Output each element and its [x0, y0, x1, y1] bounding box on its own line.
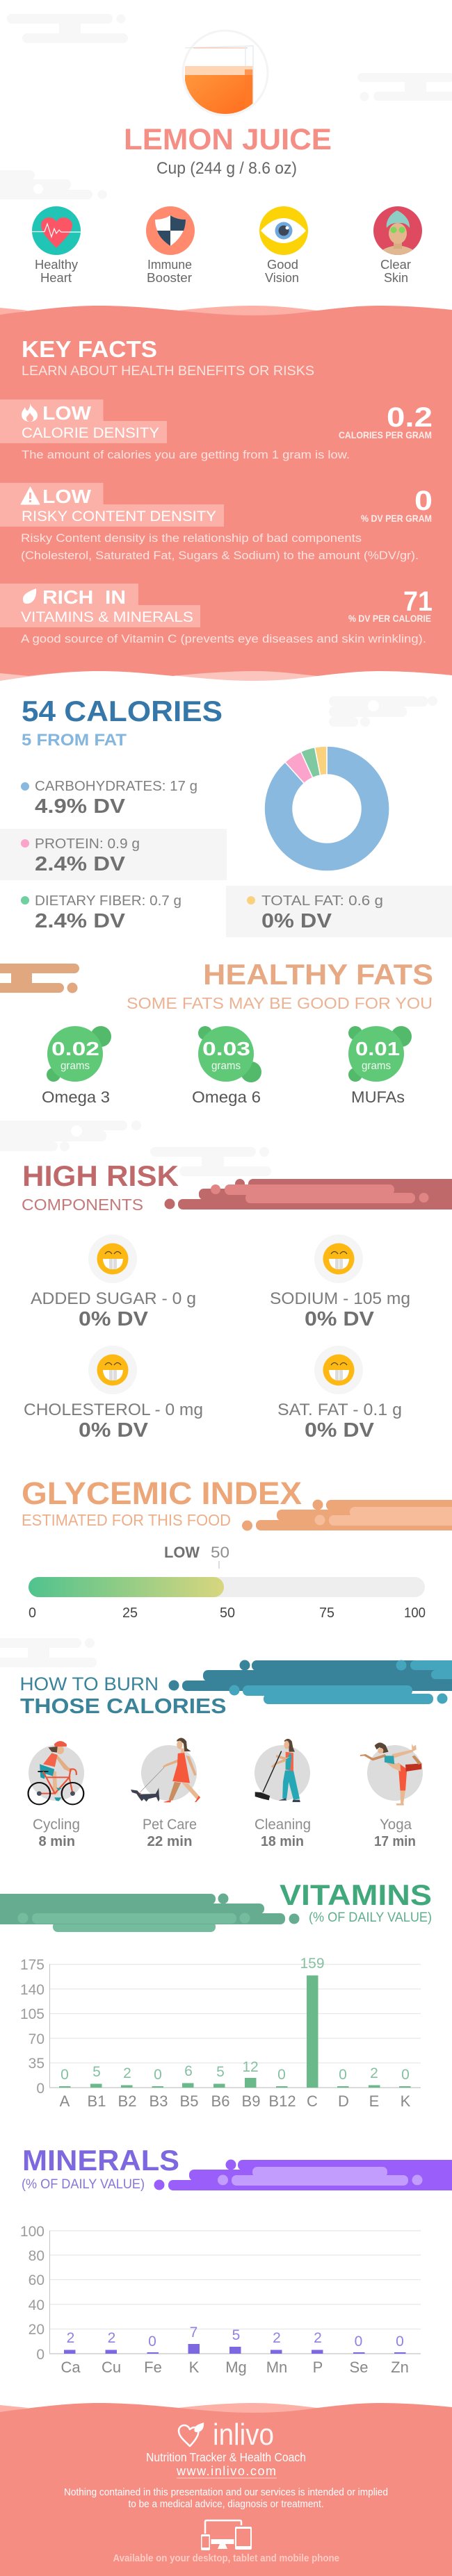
bar chart: minerals: 60	[29, 2272, 45, 2288]
bar chart: vitamins: 0	[154, 2067, 162, 2083]
bar chart: minerals: Fe	[144, 2359, 162, 2376]
fact: calorie density: CALORIE DENSITY	[22, 425, 159, 441]
item: sodium: 0% DV	[305, 1308, 375, 1330]
item: saturated fat	[277, 1346, 402, 1442]
subheading: (% OF DAILY VALUE)	[309, 1910, 432, 1925]
heading line 1: HOW TO BURN	[19, 1674, 159, 1694]
fact: calorie density: LOW	[42, 402, 92, 424]
bar chart: vitamins: B12	[268, 2092, 296, 2110]
bar chart: minerals: Mg	[225, 2359, 247, 2376]
bar chart: vitamins: 12	[242, 2059, 259, 2075]
bar chart: vitamins: 6	[184, 2063, 193, 2079]
heading: KEY FACTS	[22, 336, 157, 362]
fact: risky content density: (Cholesterol, Saturated Fat, Sugars & Sodium) to the amount (%DV/gr).	[21, 549, 419, 562]
panel: footer	[0, 2403, 452, 2576]
legend: protein: 2.4% DV	[35, 853, 126, 875]
bar chart: minerals: 20	[29, 2322, 45, 2338]
benefit: immune booster	[146, 206, 195, 285]
heading: 54 CALORIES	[22, 695, 223, 727]
activity: yoga: Yoga	[380, 1817, 412, 1833]
fact: risky content density	[0, 483, 433, 562]
panel: glycemic index	[22, 1476, 452, 1621]
bar chart: minerals: 80	[29, 2248, 45, 2264]
bar chart: vitamins: 5	[216, 2064, 225, 2080]
omega 6: Omega 6	[192, 1088, 261, 1106]
bar chart: minerals: Zn	[391, 2359, 409, 2376]
bar chart: vitamins: B3	[150, 2092, 168, 2110]
fact: rich in vitamins and minerals: % DV PER CALORIE	[348, 613, 431, 624]
bar chart: vitamins: 5	[92, 2064, 101, 2080]
subheading: COMPONENTS	[22, 1196, 143, 1214]
panel: calories	[0, 695, 452, 937]
item: saturated fat: SAT. FAT - 0.1 g	[277, 1401, 402, 1419]
bar chart: vitamins: A	[60, 2092, 70, 2110]
background cloud: calories	[329, 696, 437, 727]
bar chart: vitamins: 0	[401, 2067, 410, 2083]
fact: rich in vitamins and minerals: RICH IN	[42, 586, 126, 608]
activity: cleaning	[255, 1739, 311, 1849]
legend: dietary fiber: 2.4% DV	[35, 910, 126, 932]
bar chart: minerals: 7	[190, 2325, 197, 2340]
subheading: ESTIMATED FOR THIS FOOD	[22, 1511, 231, 1529]
icon: devices	[201, 2520, 252, 2550]
gauge scale: 25	[122, 1605, 138, 1621]
activity: pet care	[131, 1738, 200, 1849]
background cloud: burn	[0, 1638, 97, 1667]
fact: rich in vitamins and minerals	[0, 584, 433, 645]
disclaimer	[64, 2486, 388, 2510]
decorative bars: vitamins	[0, 1894, 299, 1932]
heading: HEALTHY FATS	[203, 958, 433, 991]
omega 3: 0.02	[51, 1038, 99, 1059]
website: www.inlivo.com	[176, 2464, 276, 2478]
bar chart: vitamins: 2	[370, 2065, 378, 2081]
item: cholesterol	[24, 1346, 203, 1442]
fact: rich in vitamins and minerals: 71	[403, 586, 433, 617]
omega 3: grams	[60, 1060, 90, 1072]
bar chart: vitamins: E	[369, 2092, 379, 2110]
omega 6	[192, 1026, 261, 1106]
benefit: immune booster: Booster	[147, 271, 192, 285]
decorative bar: fats	[0, 964, 79, 993]
activity: cycling	[29, 1741, 84, 1849]
donut chart	[264, 746, 389, 871]
decorative bars: burn	[168, 1660, 452, 1704]
fact: rich in vitamins and minerals: VITAMINS & MINERALS	[21, 609, 193, 625]
bar chart: vitamins: 2	[123, 2065, 131, 2081]
bar chart: vitamins: B6	[211, 2092, 229, 2110]
activity: pet care: 22 min	[147, 1834, 192, 1849]
fact: risky content density: Risky Content density is the relationship of bad components	[21, 531, 362, 545]
fact: calorie density: CALORIES PER GRAM	[339, 429, 432, 440]
background clouds: top	[0, 14, 452, 199]
panel: how to burn those calories	[19, 1660, 452, 1849]
benefit: clear skin: Clear	[380, 258, 411, 272]
gauge value	[164, 1544, 229, 1569]
bar chart: vitamins: C	[307, 2092, 318, 2110]
heading: HIGH RISK	[22, 1159, 179, 1192]
bar chart: minerals: 40	[29, 2297, 45, 2313]
disclaimer: to be a medical advice, diagnosis or treatment.	[128, 2498, 324, 2510]
legend: protein: PROTEIN: 0.9 g	[35, 836, 140, 852]
logo: inlivo	[213, 2418, 274, 2452]
item: cholesterol: 0% DV	[79, 1419, 149, 1442]
subheading: SOME FATS MAY BE GOOD FOR YOU	[127, 994, 433, 1012]
bar chart: minerals: Ca	[60, 2359, 81, 2376]
bar chart: minerals: K	[189, 2359, 200, 2376]
decorative bars: high risk	[164, 1179, 452, 1209]
activity: pet care: Pet Care	[143, 1817, 197, 1833]
bar chart: minerals: 2	[108, 2330, 115, 2346]
item: saturated fat: 0% DV	[305, 1419, 375, 1442]
decorative bars: glycemic	[242, 1499, 452, 1531]
legend: dietary fiber	[21, 893, 181, 932]
title: LEMON JUICE	[124, 123, 332, 156]
mufas: 0.01	[355, 1038, 400, 1059]
bar chart: minerals	[20, 2224, 421, 2376]
activity: cleaning: Cleaning	[255, 1817, 311, 1833]
hero image: glass of lemon juice	[183, 31, 268, 118]
availability note: Available on your desktop, tablet and mobile phone	[113, 2552, 339, 2564]
benefit: healthy heart: Healthy	[35, 258, 78, 272]
bar chart: minerals: Cu	[102, 2359, 121, 2376]
fact: calorie density: The amount of calories you are getting from 1 gram is low.	[22, 448, 350, 461]
bar chart: vitamins: 0	[36, 2081, 45, 2097]
gauge value: LOW	[164, 1544, 200, 1561]
gauge scale: 50	[220, 1605, 235, 1621]
fact: risky content density: 0	[414, 486, 433, 516]
bar chart: minerals: 0	[148, 2334, 156, 2350]
bar chart: vitamins: D	[338, 2092, 349, 2110]
legend: dietary fiber: DIETARY FIBER: 0.7 g	[35, 893, 181, 909]
benefit: healthy heart	[32, 206, 81, 285]
gauge scale: 75	[319, 1605, 334, 1621]
item: added sugar: ADDED SUGAR - 0 g	[31, 1289, 196, 1308]
omega 6: grams	[211, 1060, 241, 1072]
disclaimer: Nothing contained in this presentation and our services is intended or implied	[64, 2486, 388, 2498]
bar chart: vitamins: K	[401, 2092, 411, 2110]
item: sodium: SODIUM - 105 mg	[270, 1289, 410, 1308]
fact: rich in vitamins and minerals: A good source of Vitamin C (prevents eye diseases and skin wrinkling).	[21, 632, 426, 645]
bar chart: vitamins: 175	[20, 1957, 45, 1973]
bar chart: vitamins: 35	[29, 2056, 45, 2072]
activity: cycling: Cycling	[33, 1817, 80, 1833]
subheading: (% OF DAILY VALUE)	[22, 2177, 145, 2192]
heading: GLYCEMIC INDEX	[22, 1476, 302, 1511]
fact: risky content density: RISKY CONTENT DENSITY	[22, 509, 216, 525]
bar chart: vitamins: 0	[60, 2067, 69, 2083]
bar chart: minerals: 0	[355, 2334, 362, 2350]
fact: risky content density: % DV PER GRAM	[361, 513, 432, 524]
bar chart: vitamins: 140	[20, 1982, 45, 1998]
bar chart: minerals: 0	[36, 2347, 45, 2363]
omega 3: Omega 3	[42, 1088, 110, 1106]
gauge scale: 100	[404, 1605, 426, 1621]
gauge value: 50	[211, 1544, 229, 1561]
bar chart: vitamins	[20, 1956, 421, 2110]
benefit: clear skin: Skin	[384, 271, 408, 285]
panel: key facts	[0, 306, 452, 681]
benefit: good vision: Vision	[265, 271, 299, 285]
bar chart: minerals: 100	[20, 2224, 45, 2240]
item: added sugar: 0% DV	[79, 1308, 149, 1330]
fact: calorie density	[0, 399, 433, 461]
activity: yoga	[360, 1742, 423, 1849]
bar chart: minerals: 2	[273, 2330, 281, 2346]
panel: vitamins	[0, 1879, 432, 2110]
bar chart: vitamins: 105	[20, 2006, 45, 2022]
bar chart: minerals: P	[313, 2359, 323, 2376]
bar chart: vitamins: B1	[88, 2092, 106, 2110]
bar chart: minerals: 0	[396, 2334, 404, 2350]
bar chart: minerals: 5	[232, 2327, 240, 2343]
legend: carbohydrates: 4.9% DV	[35, 795, 126, 818]
logo	[179, 2418, 274, 2452]
benefit: good vision	[259, 206, 308, 285]
legend: total fat	[226, 886, 452, 937]
subheading: 5 FROM FAT	[22, 731, 127, 750]
heading line 2: THOSE CALORIES	[20, 1694, 227, 1718]
legend: total fat: 0% DV	[261, 910, 332, 932]
activity: yoga: 17 min	[374, 1834, 416, 1849]
panel: minerals	[20, 2144, 452, 2376]
legend: protein	[0, 829, 227, 880]
legend: total fat: TOTAL FAT: 0.6 g	[261, 893, 383, 909]
fact: risky content density: LOW	[42, 486, 92, 507]
legend: carbohydrates	[21, 778, 197, 818]
heading: MINERALS	[22, 2144, 179, 2177]
mufas: grams	[362, 1060, 391, 1072]
activity: cycling: 8 min	[39, 1834, 75, 1849]
activity: cleaning: 18 min	[261, 1834, 304, 1849]
bar chart: vitamins: 159	[300, 1956, 325, 1972]
bar chart: vitamins: 0	[277, 2067, 286, 2083]
item: added sugar	[31, 1235, 196, 1330]
mufas	[348, 1026, 412, 1106]
decorative bars: minerals	[154, 2159, 452, 2190]
panel: healthy fats	[0, 958, 433, 1106]
serving size: Cup (244 g / 8.6 oz)	[156, 159, 297, 178]
bar chart: vitamins: 0	[339, 2067, 347, 2083]
benefit: good vision: Good	[267, 258, 298, 272]
benefit: immune booster: Immune	[147, 258, 192, 272]
omega 3	[42, 1026, 111, 1106]
bar chart: minerals: Se	[350, 2359, 368, 2376]
mufas: MUFAs	[351, 1088, 405, 1106]
benefit: healthy heart: Heart	[40, 271, 72, 285]
gauge scale	[29, 1605, 426, 1621]
benefit: clear skin	[373, 206, 422, 285]
subheading: LEARN ABOUT HEALTH BENEFITS OR RISKS	[22, 364, 314, 379]
legend: carbohydrates: CARBOHYDRATES: 17 g	[35, 778, 197, 794]
gauge bar	[29, 1577, 425, 1597]
panel: high risk	[22, 1159, 452, 1442]
fact: calorie density: 0.2	[387, 402, 433, 433]
bar chart: minerals: 2	[67, 2330, 74, 2346]
bar chart: minerals: 2	[314, 2330, 322, 2346]
background clouds: mid	[0, 1121, 271, 1176]
bar chart: vitamins: B5	[180, 2092, 198, 2110]
omega 6: 0.03	[202, 1038, 250, 1059]
bar chart: vitamins: 70	[29, 2031, 45, 2047]
item: sodium	[270, 1235, 410, 1330]
tagline: Nutrition Tracker & Health Coach	[146, 2450, 306, 2464]
bar chart: minerals: Mn	[266, 2359, 287, 2376]
heading: VITAMINS	[280, 1879, 432, 1911]
gauge scale: 0	[29, 1605, 36, 1621]
bar chart: vitamins: B2	[118, 2092, 136, 2110]
bar chart: vitamins: B9	[242, 2092, 260, 2110]
item: cholesterol: CHOLESTEROL - 0 mg	[24, 1401, 203, 1419]
